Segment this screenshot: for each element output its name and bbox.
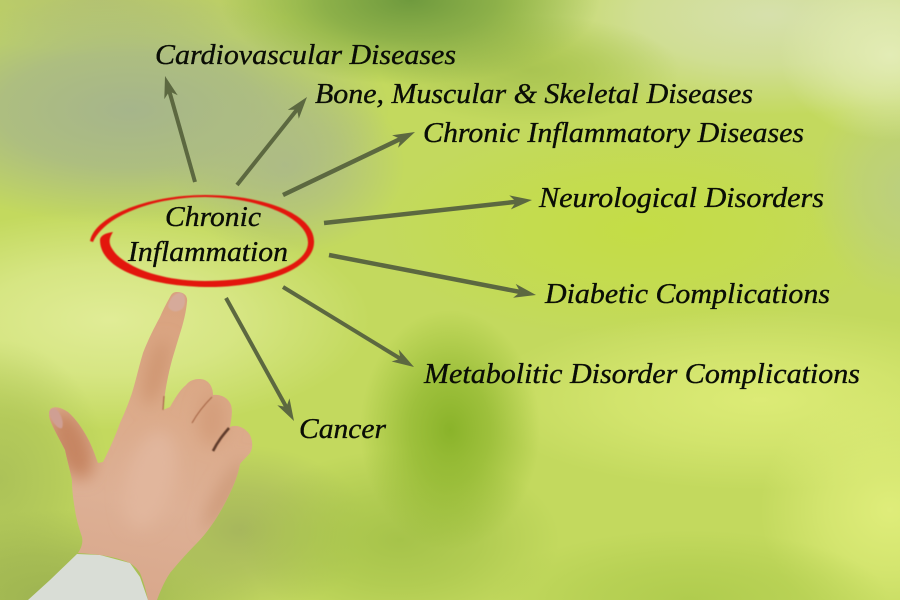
arrow: to bone, muscular and skeletal diseases: [237, 97, 307, 185]
index finger nail: [168, 293, 185, 311]
thumb nail: [49, 408, 63, 428]
shirt cuff: [28, 554, 148, 600]
arrow: to cardiovascular diseases: [164, 76, 195, 182]
red hand-drawn ellipse: [90, 195, 314, 287]
finger creases: [163, 396, 229, 451]
arrow: to neurological disorders: [324, 195, 532, 223]
central label: chronic inflammation: Chronic: [165, 202, 262, 233]
label: diabetic complications: Diabetic Complications: [544, 279, 830, 310]
central label: chronic inflammation: [127, 202, 288, 268]
label: cardiovascular diseases: Cardiovascular Diseases: [155, 40, 456, 71]
arrow: to cancer: [226, 298, 294, 421]
icon: pointing hand: [28, 285, 260, 600]
label: neurological disorders: Neurological Disorders: [538, 183, 824, 214]
label: chronic inflammatory diseases: Chronic Inflammatory Diseases: [423, 118, 804, 149]
arrow: to metabolitic disorder complications: [283, 287, 414, 367]
arrow: to diabetic complications: [329, 255, 536, 298]
label: cancer: Cancer: [299, 414, 386, 445]
skin shading: [49, 292, 240, 528]
label: metabolitic disorder complications: Metabolitic Disorder Complications: [423, 359, 860, 390]
central label: chronic inflammation: Inflammation: [127, 237, 288, 268]
arrow: to chronic inflammatory diseases: [283, 132, 415, 195]
label: bone, muscular and skeletal diseases: Bone, Muscular & Skeletal Diseases: [315, 79, 753, 110]
hand, thumb and fingers: [40, 285, 260, 600]
